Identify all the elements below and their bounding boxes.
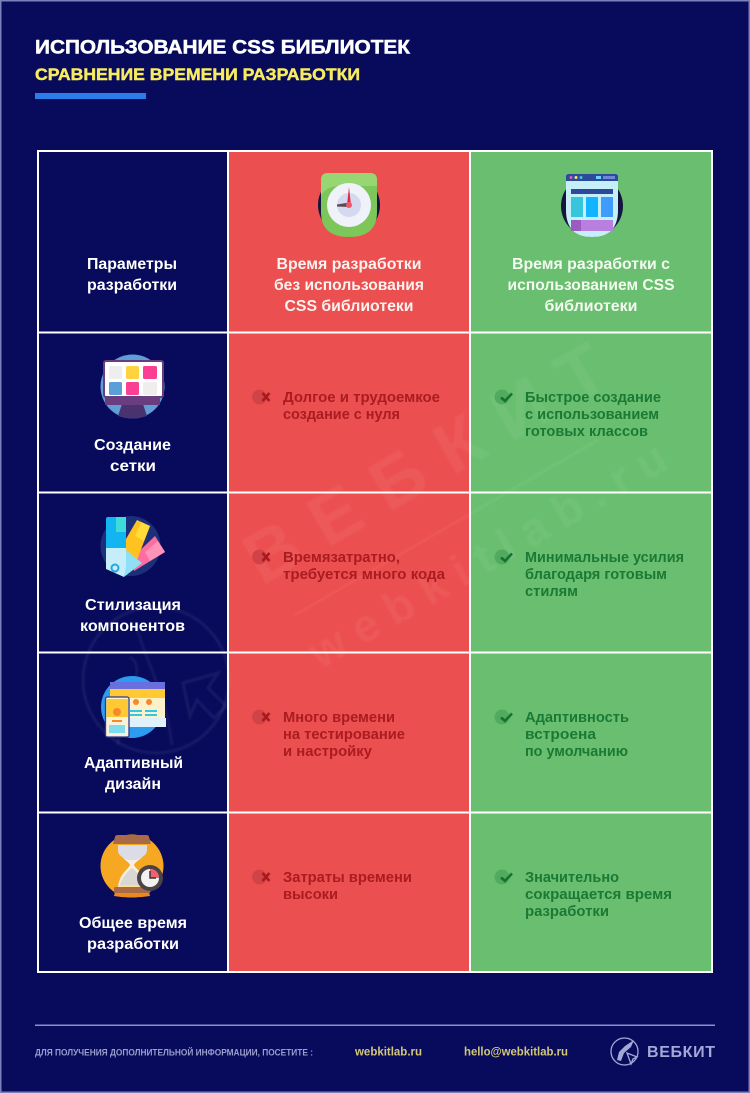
- text: time reduced: Значительно: [525, 870, 619, 886]
- heading: parameters: разработки: [87, 277, 177, 294]
- heading: with library: Время разработки с: [512, 256, 670, 273]
- label: grid: Создание: [94, 437, 171, 454]
- watermark: ВЕБКИТ: [230, 328, 621, 600]
- text: high costs: высоки: [283, 887, 338, 903]
- panel: comparison table: [38, 151, 712, 972]
- text: much code: Времязатратно,: [283, 550, 400, 566]
- text: time reduced: [525, 870, 672, 920]
- icon: check: [494, 870, 512, 884]
- row 2 with library: [494, 550, 684, 600]
- text: high costs: [283, 870, 412, 903]
- icon: monitor grid: [100, 354, 164, 418]
- table grid lines: [38, 151, 712, 972]
- icon: colour swatches: [100, 516, 165, 577]
- footer note: ДЛЯ ПОЛУЧЕНИЯ ДОПОЛНИТЕЛЬНОЙ ИНФОРМАЦИИ, ПОСЕТИТЕ :: [35, 1046, 313, 1058]
- label: styling: компонентов: [80, 618, 185, 635]
- footer website: webkitlab.ru: [354, 1044, 422, 1058]
- text: long work: создание с нуля: [283, 407, 400, 423]
- label: total time: разработки: [87, 936, 179, 953]
- icon: cross: [252, 710, 270, 724]
- icon: check: [494, 390, 512, 404]
- text: fast: с использованием: [525, 407, 659, 423]
- footer divider: [35, 1024, 715, 1026]
- heading: with library: использованием CSS: [508, 277, 674, 294]
- row 3 without library: [252, 710, 405, 760]
- panel: without library column: [228, 151, 470, 972]
- logo: [611, 1038, 715, 1065]
- panel: parameters column: [38, 151, 228, 972]
- heading: with library: библиотеки: [544, 298, 638, 315]
- text: adaptive: по умолчанию: [525, 744, 628, 760]
- icon: web layout: [561, 174, 623, 237]
- watermark: [83, 328, 676, 753]
- text: high costs: Затраты времени: [283, 870, 412, 886]
- icon: logo mark: [611, 1038, 638, 1065]
- subtitle: СРАВНЕНИЕ ВРЕМЕНИ РАЗРАБОТКИ: [35, 66, 360, 84]
- text: time reduced: разработки: [525, 904, 609, 920]
- label: styling: [80, 597, 185, 635]
- icon: cross: [252, 550, 270, 564]
- row 1 without library: [252, 390, 440, 423]
- text: minimal effort: стилям: [525, 584, 578, 600]
- text: minimal effort: благодаря готовым: [525, 567, 667, 583]
- icon: check: [494, 710, 512, 724]
- label: styling: Стилизация: [85, 597, 181, 614]
- row 1 with library: [494, 390, 661, 440]
- label: total time: Общее время: [79, 915, 187, 932]
- icon: check: [494, 550, 512, 564]
- heading: parameters: [87, 256, 177, 294]
- text: adaptive: Адаптивность: [525, 710, 629, 726]
- panel: with library column: [470, 151, 712, 972]
- text: testing: и настройку: [283, 744, 372, 760]
- wordmark: ВЕБКИТ: [647, 1044, 715, 1061]
- row 2 without library: [252, 550, 446, 583]
- label: grid: [94, 437, 171, 475]
- text: fast: [525, 390, 661, 440]
- row 4 with library: [494, 870, 672, 920]
- heading: without library: Время разработки: [276, 256, 422, 273]
- watermark: webkitlab.ru: [298, 431, 676, 679]
- text: testing: Много времени: [283, 710, 395, 726]
- text: fast: Быстрое создание: [525, 390, 661, 406]
- icon: responsive design: [101, 676, 166, 738]
- title: ИСПОЛЬЗОВАНИЕ CSS БИБЛИОТЕК: [35, 38, 410, 58]
- text: testing: [283, 710, 405, 760]
- heading: without library: CSS библиотеки: [284, 298, 414, 315]
- heading: with library: [508, 256, 674, 315]
- text: long work: Долгое и трудоемкое: [283, 390, 440, 406]
- footer email: hello@webkitlab.ru: [464, 1044, 568, 1058]
- label: total time: [79, 915, 187, 953]
- text: testing: на тестирование: [283, 727, 405, 743]
- text: minimal effort: [525, 550, 684, 600]
- text: much code: [283, 550, 446, 583]
- label: responsive: [84, 755, 183, 793]
- title accent bar: [35, 93, 146, 99]
- row 4 without library: [252, 870, 412, 903]
- icon: cross: [252, 870, 270, 884]
- heading: parameters: Параметры: [87, 256, 177, 273]
- text: minimal effort: Минимальные усилия: [525, 550, 684, 566]
- icon: hourglass: [100, 834, 164, 898]
- text: time reduced: сокращается время: [525, 887, 672, 903]
- text: adaptive: [525, 710, 629, 760]
- text: long work: [283, 390, 440, 423]
- label: responsive: Адаптивный: [84, 755, 183, 772]
- text: fast: готовых классов: [525, 424, 648, 440]
- icon: clock: [318, 173, 380, 237]
- text: much code: требуется много кода: [283, 567, 446, 583]
- row 3 with library: [494, 710, 629, 760]
- heading: without library: без использования: [274, 277, 424, 294]
- label: grid: сетки: [110, 458, 156, 475]
- icon: cross: [252, 390, 270, 404]
- text: adaptive: встроена: [525, 727, 597, 743]
- heading: without library: [274, 256, 424, 315]
- label: responsive: дизайн: [105, 776, 161, 793]
